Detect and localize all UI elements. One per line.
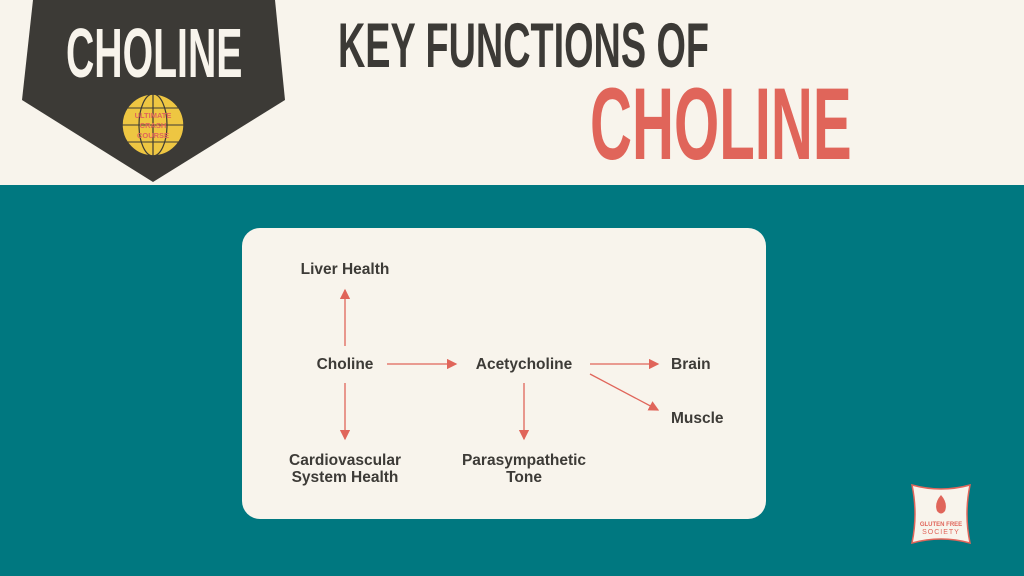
panel: diagram — [242, 228, 766, 519]
logo: gluten free society: GLUTEN FREE — [920, 522, 962, 528]
arrows — [340, 288, 660, 440]
label: liver: Liver Health — [301, 261, 389, 278]
logo: gluten free society: SOCIETY — [922, 529, 960, 536]
badge title: CHOLINE — [66, 14, 242, 92]
title highlight: CHOLINE — [590, 67, 852, 181]
label: cardiovascular: System Health — [292, 469, 398, 486]
icon: globe badge: COURSE — [137, 131, 169, 140]
label: parasympathetic: Tone — [506, 469, 542, 486]
icon: globe badge: ULTIMATE — [135, 111, 171, 120]
logo: gluten free society — [911, 484, 971, 544]
label: cardiovascular — [289, 452, 401, 486]
label: brain: Brain — [671, 356, 711, 373]
title: KEY FUNCTIONS OF — [338, 11, 709, 81]
label: cardiovascular: Cardiovascular — [289, 452, 401, 469]
label: choline: Choline — [317, 356, 373, 373]
icon: globe badge: CRASH — [140, 121, 166, 130]
teal section — [0, 185, 1024, 576]
icon: globe badge — [122, 94, 184, 156]
label: acetycholine: Acetycholine — [476, 356, 572, 373]
label: muscle: Muscle — [671, 410, 724, 427]
header badge — [22, 0, 285, 182]
label: parasympathetic — [462, 452, 586, 486]
label: parasympathetic: Parasympathetic — [462, 452, 586, 469]
